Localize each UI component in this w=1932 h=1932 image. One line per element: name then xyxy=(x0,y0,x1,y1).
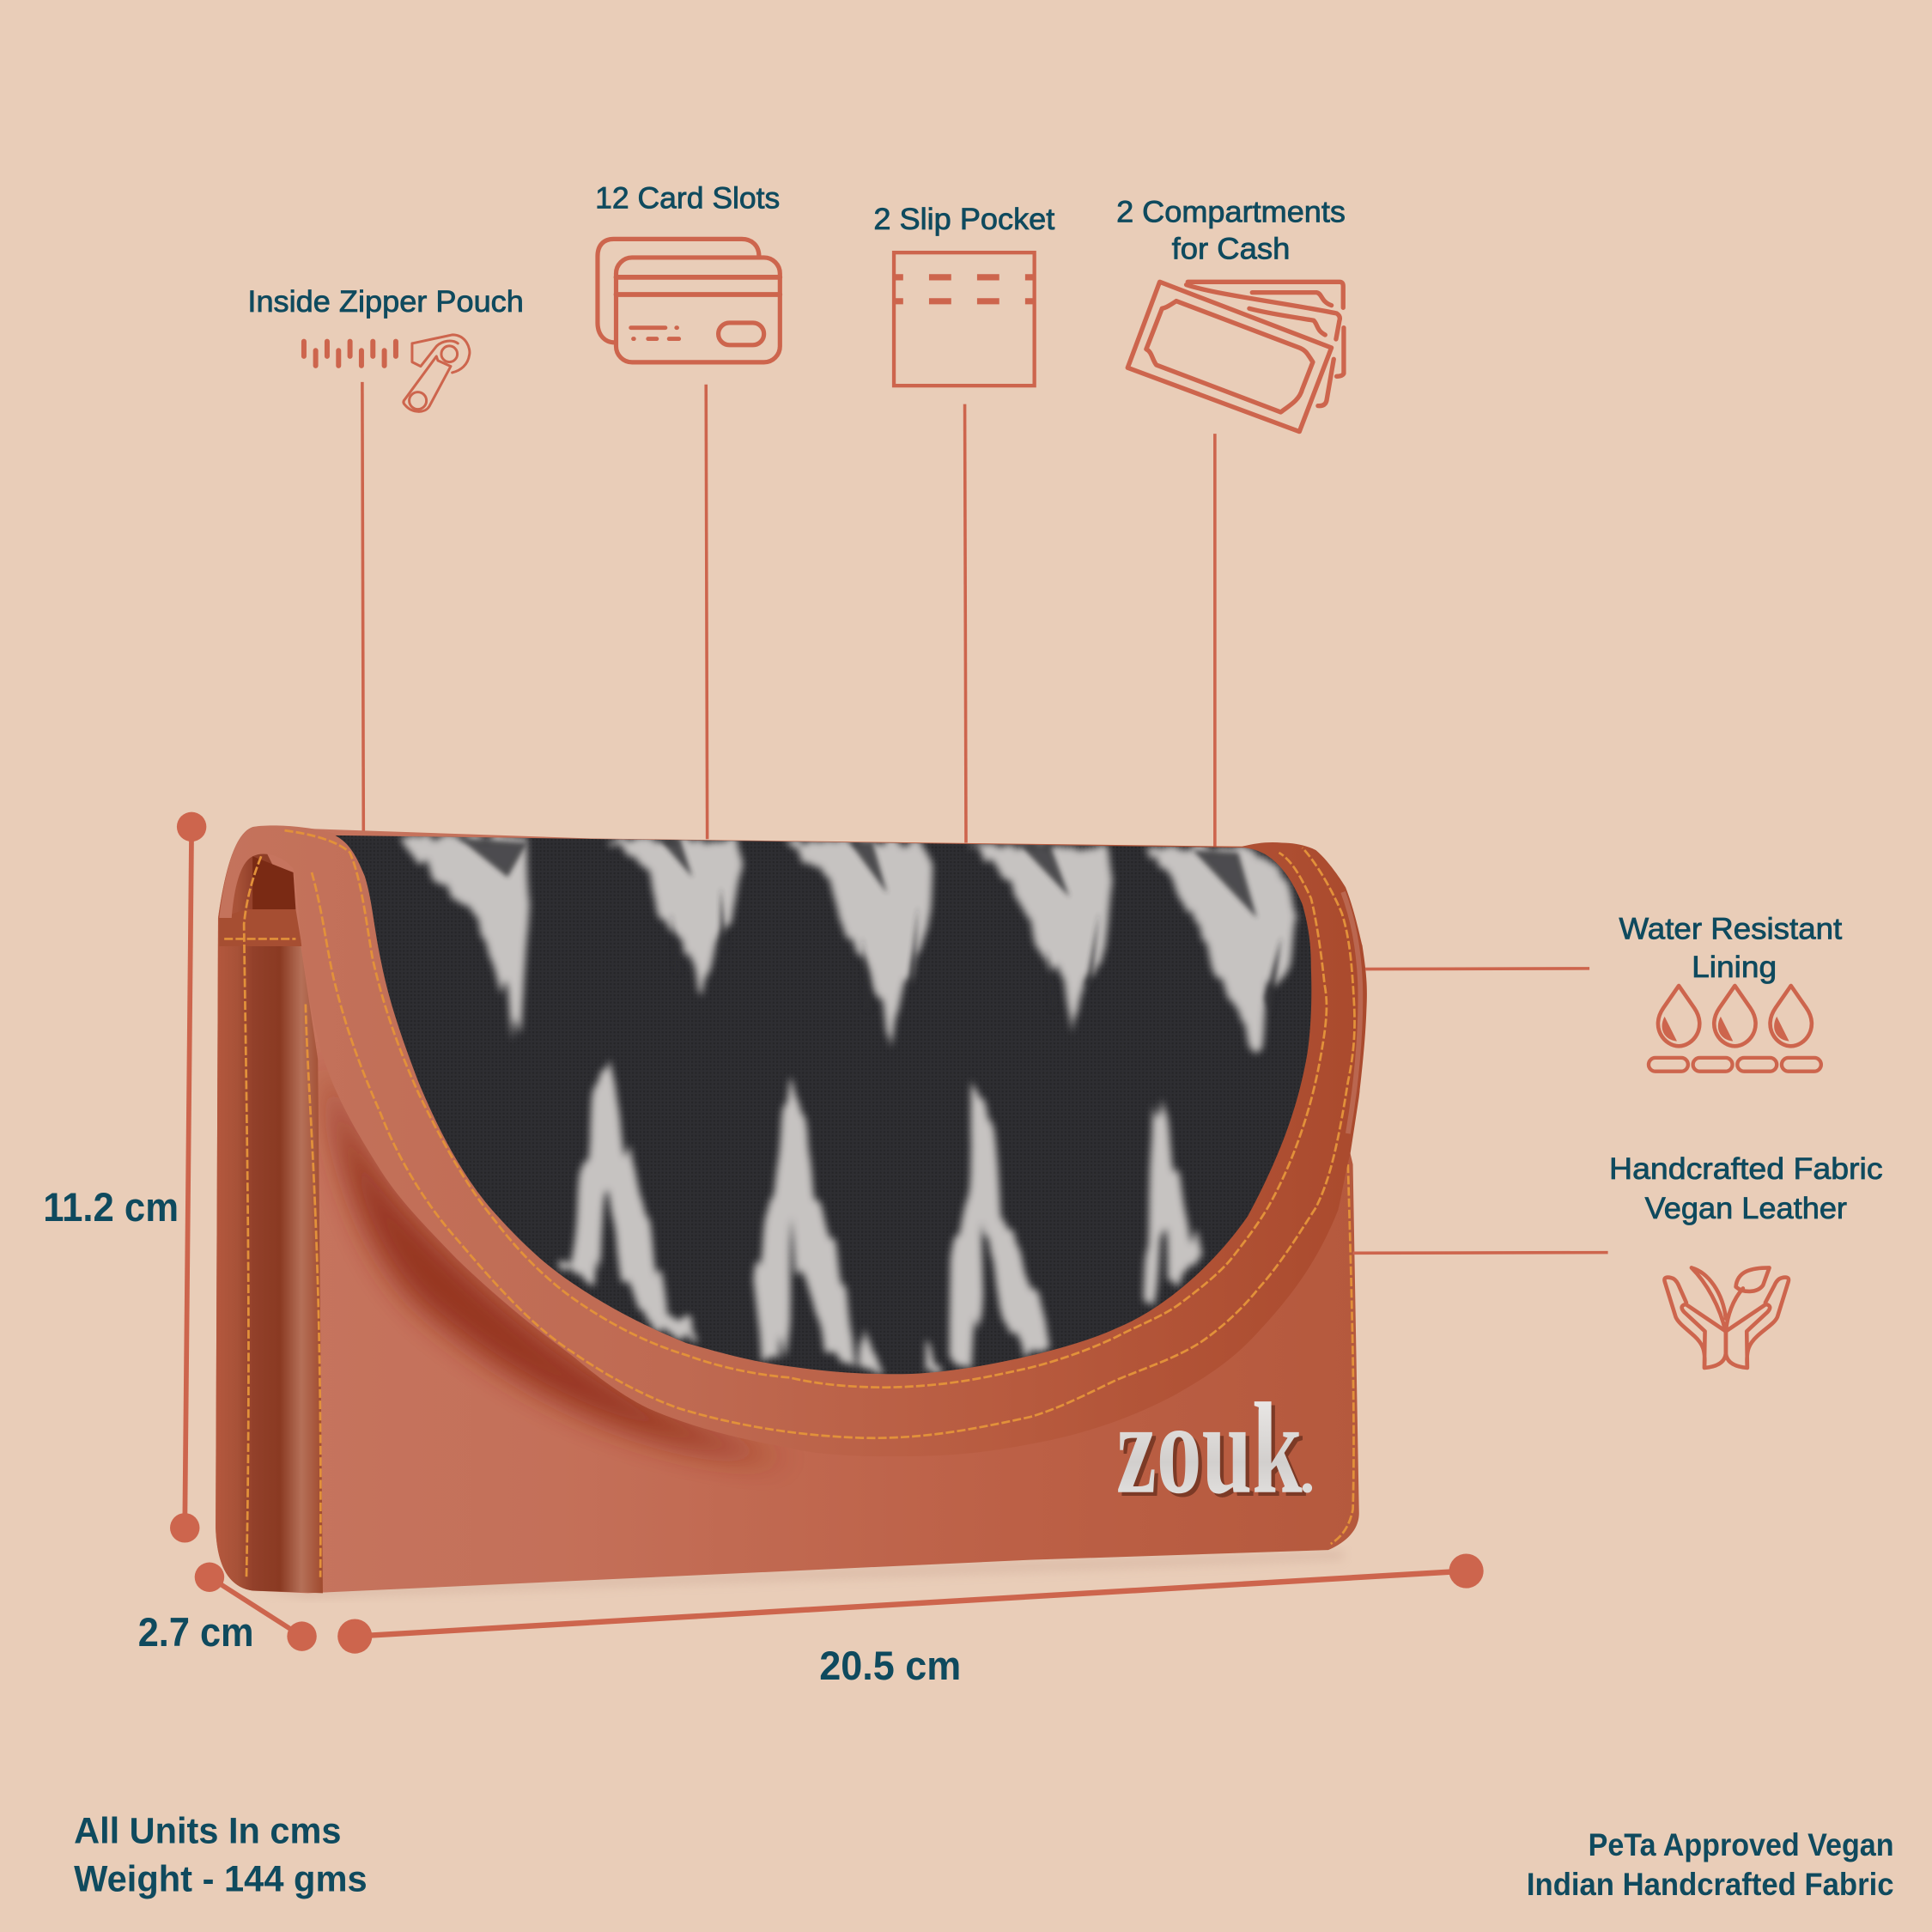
dimension: height 11.2 cm xyxy=(43,812,206,1543)
label: 12 Card Slots: 12 Card Slots xyxy=(595,182,780,216)
label: compartments for cash: 2 Compartments xyxy=(1116,195,1346,228)
footnote: certifications: Indian Handcrafted Fabric xyxy=(1527,1867,1894,1902)
product: wallet photo xyxy=(216,825,1367,1598)
fabric base xyxy=(320,825,1331,1392)
label: handcrafted fabric vegan leather xyxy=(1609,1152,1883,1225)
ikat pattern: dark streaks xyxy=(459,838,1281,1017)
label: Inside Zipper Pouch: Inside Zipper Pouch xyxy=(247,285,524,319)
logo: zouk: zouk xyxy=(1120,1379,1306,1524)
wallet body xyxy=(216,827,1359,1593)
icon: cards xyxy=(598,239,780,362)
callout: water resistant lining xyxy=(1619,912,1842,1072)
callout: card slots xyxy=(595,182,780,839)
icon: water drops xyxy=(1649,986,1821,1072)
footnote: certifications: PeTa Approved Vegan xyxy=(1589,1827,1894,1862)
gusset stitching xyxy=(224,856,320,1577)
label: 2 Slip Pocket: 2 Slip Pocket xyxy=(873,203,1055,236)
icon: hands with leaf xyxy=(1664,1267,1789,1368)
ground shadow xyxy=(252,1550,1343,1598)
dimension: width 20.5 cm: 20.5 cm xyxy=(819,1643,961,1689)
label: handcrafted fabric vegan leather: Vegan Leather xyxy=(1645,1192,1847,1225)
label: handcrafted fabric vegan leather: Handcrafted Fabric xyxy=(1609,1152,1883,1186)
dimension: height 11.2 cm: 11.2 cm xyxy=(43,1185,179,1230)
footnote: units and weight: All Units In cms xyxy=(74,1811,341,1852)
callout: cash compartments xyxy=(1116,195,1346,848)
right edge stitching xyxy=(1331,1164,1354,1544)
label: compartments for cash xyxy=(1116,195,1346,265)
label: water resistant lining: Water Resistant xyxy=(1619,912,1842,945)
leader line xyxy=(362,382,363,835)
icon: pocket xyxy=(893,252,1035,386)
logo: zouk: zouk xyxy=(1116,1376,1303,1521)
logo: zouk: . xyxy=(1300,1440,1315,1505)
footnote: certifications xyxy=(1527,1827,1894,1902)
label: water resistant lining: Lining xyxy=(1692,951,1777,984)
callout line: water resistant xyxy=(1365,968,1589,970)
leader line xyxy=(1214,434,1216,848)
callout: handcrafted fabric vegan leather xyxy=(1609,1152,1883,1368)
icon: banknotes xyxy=(1127,282,1344,432)
flap shadow xyxy=(323,1056,788,1460)
gusset opening xyxy=(252,856,295,918)
callout: slip pocket xyxy=(873,203,1055,843)
side gusset xyxy=(216,827,323,1593)
ikat pattern: main flames xyxy=(396,835,1297,1371)
icon: zipper xyxy=(304,335,470,411)
dimension: depth 2.7 cm xyxy=(138,1563,317,1656)
band edge highlight xyxy=(1343,892,1360,1133)
flap band xyxy=(219,825,1367,1456)
leader line xyxy=(965,404,966,843)
label: water resistant lining xyxy=(1619,912,1842,984)
footnote: units and weight: Weight - 144 gms xyxy=(74,1859,368,1900)
dimension: depth 2.7 cm: 2.7 cm xyxy=(138,1610,254,1656)
fabric flap xyxy=(320,825,1331,1392)
dimension: width 20.5 cm xyxy=(337,1553,1484,1689)
footnote: units and weight xyxy=(74,1811,368,1900)
label: compartments for cash: for Cash xyxy=(1172,232,1290,265)
gusset top fold xyxy=(219,909,302,946)
band stitching xyxy=(284,830,1327,1388)
leader line xyxy=(706,385,708,839)
callout line: vegan leather xyxy=(1353,1251,1608,1255)
callout: inside zipper pouch xyxy=(247,285,524,835)
